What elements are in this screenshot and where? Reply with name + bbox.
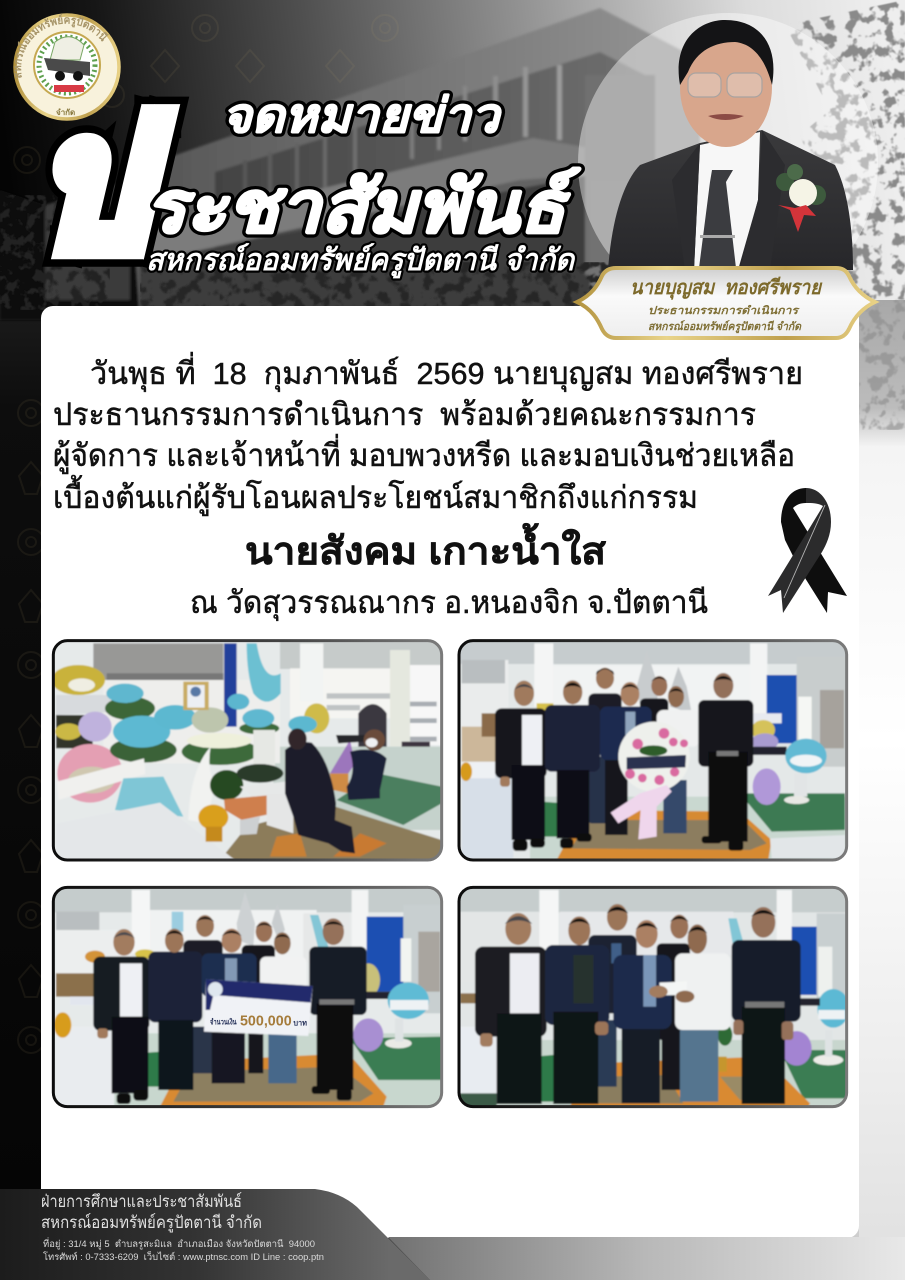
flower corsage xyxy=(776,164,826,232)
footer contact: โทรศัพท์ : 0-7333-6209 เว็บไซต์ : www.ptnsc.com ID Line : coop.ptn xyxy=(43,1250,324,1263)
right side tree xyxy=(785,0,905,430)
head xyxy=(680,27,772,147)
hair xyxy=(679,20,773,85)
photo 4: handing over envelope xyxy=(459,887,849,1107)
portrait of chairman xyxy=(608,20,853,270)
mouth xyxy=(708,114,744,120)
lapels xyxy=(672,130,785,270)
icon: black mourning ribbon xyxy=(768,488,847,613)
footer address: ที่อยู่ : 31/4 หมู่ 5 ตำบลรูสะมิแล อำเภอเมือง จังหวัดปัตตานี 94000 xyxy=(43,1237,315,1250)
wreath xyxy=(618,722,690,792)
cheque board xyxy=(204,979,313,1036)
footer department: ฝ่ายการศึกษาและประชาสัมพันธ์ xyxy=(41,1192,242,1211)
line 1: วันพุธ ที่ 18 กุมภาพันธ์ 2569 นายบุญสม ทองศรีพราย xyxy=(90,352,803,393)
title: newsletter: จดหมายข่าว xyxy=(222,90,502,143)
portrait backdrop circle xyxy=(578,13,878,313)
title: newsletter: จดหมายข่าว xyxy=(222,90,502,143)
footer cooperative: สหกรณ์ออมทรัพย์ครูปัตตานี จำกัด xyxy=(41,1213,262,1233)
shirt xyxy=(694,132,760,270)
figures xyxy=(588,935,637,1013)
tie xyxy=(699,170,736,268)
line 2: ประธานกรรมการดำเนินการ พร้อมด้วยคณะกรรมการ xyxy=(53,397,756,432)
deceased name: นายสังคม เกาะน้ำใส xyxy=(245,523,607,573)
seal text: สหกรณ์ออมทรัพย์ครูปัตตานี xyxy=(14,14,109,78)
white content panel xyxy=(41,306,859,1238)
title: big letter: ป xyxy=(38,85,168,284)
figures xyxy=(182,939,224,958)
title: cooperative name: สหกรณ์ออมทรัพย์ครูปัตตานี จำกัด xyxy=(146,243,575,279)
line 3: ผู้จัดการ และเจ้าหน้าที่ มอบพวงหรีด และมอบเงินช่วยเหลือ xyxy=(53,434,795,474)
decorative motifs xyxy=(14,15,398,1053)
header building photo xyxy=(0,8,700,320)
figures xyxy=(587,692,623,713)
photo 3: group with cheque board xyxy=(53,887,442,1107)
photo 3: group with cheque board: 500,000 xyxy=(240,1013,292,1029)
cooperative name on plate: สหกรณ์ออมทรัพย์ครูปัตตานี จำกัด xyxy=(648,320,802,334)
suit xyxy=(608,130,853,270)
name plate xyxy=(577,268,875,338)
glasses xyxy=(688,73,762,97)
title: big letter: ป xyxy=(38,85,168,284)
logo seal: จำกัด xyxy=(56,108,75,117)
photo 3: group with cheque board: บาท xyxy=(293,1018,307,1027)
envelope xyxy=(658,980,676,997)
body text xyxy=(53,352,803,622)
cheque amount: จำนวนเงิน xyxy=(210,1017,237,1026)
logo seal xyxy=(13,13,121,121)
photo 2: group with wreath xyxy=(459,641,847,860)
chairman name: นายบุญสม ทองศรีพราย xyxy=(630,276,823,300)
title: public relations: ระชาสัมพันธ์ xyxy=(145,167,582,248)
location: ณ วัดสุวรรณณากร อ.หนองจิก จ.ปัตตานี xyxy=(190,585,708,622)
title: public relations: ระชาสัมพันธ์ xyxy=(145,167,582,248)
chairman position: ประธานกรรมการดำเนินการ xyxy=(648,304,800,317)
photo 1: paying respects at altar xyxy=(52,641,443,860)
footer band xyxy=(0,1189,905,1280)
line 4: เบื้องต้นแก่ผู้รับโอนผลประโยชน์สมาชิกถึงแก่กรรม xyxy=(53,475,698,516)
